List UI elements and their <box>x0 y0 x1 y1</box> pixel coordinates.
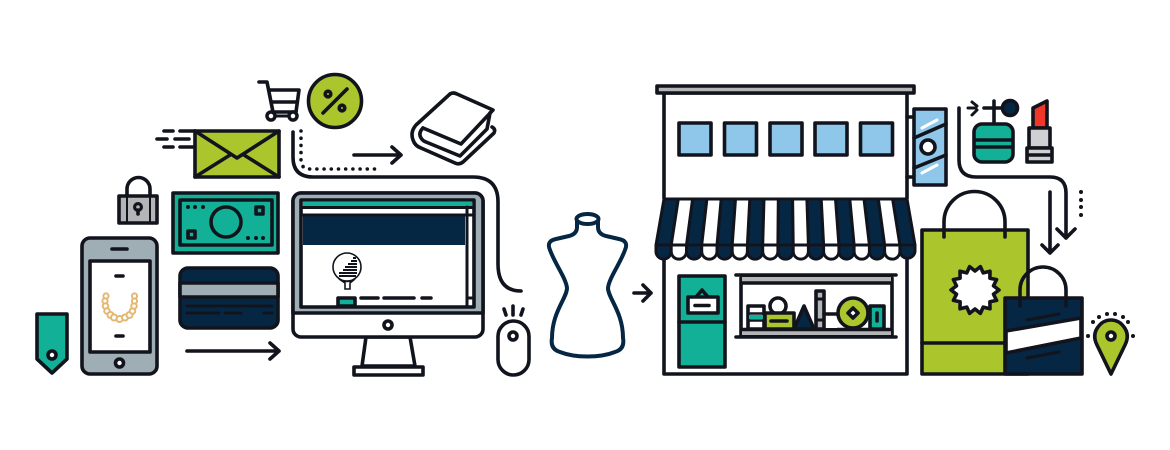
icon: dress form mannequin <box>549 214 626 356</box>
path: arrow from cosmetics into bags <box>959 108 1075 238</box>
hanging blade sign <box>907 109 946 185</box>
icon: credit card <box>180 268 278 328</box>
icon: perfume bottle <box>968 100 1018 162</box>
icon: padlock <box>119 178 157 223</box>
arrow: to book <box>354 147 401 163</box>
icon: price tag <box>37 314 67 373</box>
path: connector from cart to mouse <box>293 132 521 291</box>
icon: book <box>412 93 495 164</box>
arrow: into shopping bag <box>1042 192 1058 253</box>
icon: small navy shopping bag <box>1005 267 1082 374</box>
browser window <box>301 200 474 307</box>
arrow: to store <box>634 285 651 301</box>
upper windows <box>679 123 892 155</box>
striped awning <box>656 199 915 259</box>
icon: computer mouse <box>498 306 529 375</box>
storefront wall <box>664 93 907 374</box>
store building <box>656 86 915 374</box>
icon: location pin <box>1086 312 1135 374</box>
icon: desktop monitor <box>293 193 483 375</box>
icon: banknote <box>173 193 278 253</box>
path: dotted route <box>301 131 377 169</box>
icon: flying envelope <box>157 131 279 177</box>
roof <box>657 86 914 93</box>
dotted line <box>1079 190 1083 217</box>
icon: shopping cart <box>259 82 299 120</box>
icon: large green shopping bag <box>922 191 1028 374</box>
window merchandise <box>748 291 884 329</box>
door with hanging sign <box>679 276 725 367</box>
icon: lipstick <box>1027 101 1052 162</box>
display window <box>736 275 896 337</box>
logo: golf ball on tee <box>333 253 361 289</box>
icon: smartphone with necklace <box>82 238 157 374</box>
web page button and text <box>338 298 431 306</box>
icon: percent badge <box>308 74 362 128</box>
arrow: to desktop <box>187 343 279 359</box>
